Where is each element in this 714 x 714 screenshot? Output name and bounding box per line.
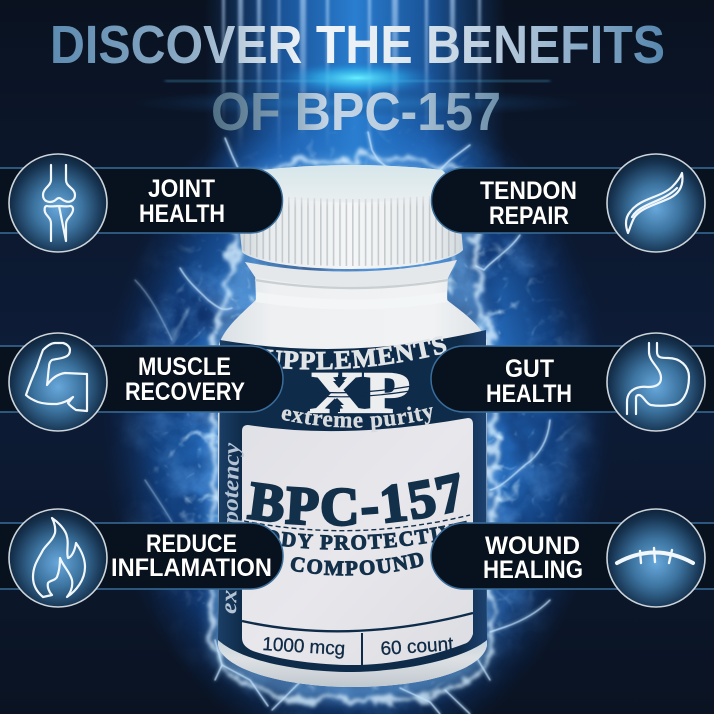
banner — [0, 346, 283, 412]
label: REDUCE — [146, 530, 237, 558]
banner — [431, 346, 714, 412]
neck shadow lines — [255, 280, 448, 304]
panel: muscle recovery — [0, 333, 283, 431]
label: WOUND — [485, 532, 580, 560]
icon: flame — [9, 509, 107, 607]
product name: BPC-157 — [246, 472, 460, 526]
icon: stitched wound — [607, 509, 705, 607]
label: GUT — [505, 355, 554, 383]
label — [486, 355, 572, 408]
panel: tendon repair — [432, 154, 714, 252]
lightning veins texture — [153, 130, 573, 710]
label — [111, 530, 272, 582]
brand tagline: extreme purity — [282, 406, 433, 432]
navy label band — [218, 330, 487, 672]
count: 60 count — [380, 634, 455, 660]
label — [125, 353, 245, 406]
lightning around bottle — [134, 130, 573, 714]
label: REPAIR — [489, 202, 569, 230]
dashed divider — [244, 515, 470, 531]
top energy glow above cap — [207, 123, 507, 207]
side text: extreme potency — [216, 442, 244, 614]
lower bottle lip — [218, 630, 487, 687]
brand name: SUPPLEMENTS — [266, 336, 446, 370]
label — [139, 175, 225, 228]
neck ring — [245, 260, 457, 287]
dose: 1000 mcg — [262, 634, 346, 660]
horizontal light disc — [131, 61, 583, 117]
label: HEALTH — [139, 200, 225, 228]
icon: tendon — [607, 154, 705, 252]
cap top — [250, 165, 455, 202]
banner — [0, 168, 282, 233]
label — [480, 177, 577, 230]
cloudy energy texture — [122, 234, 592, 714]
bright rim glow — [210, 158, 494, 702]
label: JOINT — [148, 175, 215, 203]
panel: wound healing — [431, 509, 714, 607]
lightning bolts — [135, 132, 550, 714]
jagged rim — [213, 158, 492, 702]
panel: joint health — [0, 154, 282, 252]
bottle body — [218, 272, 487, 687]
label: TENDON — [480, 177, 577, 205]
icon: stomach — [607, 333, 705, 431]
label bottom divider — [242, 613, 473, 667]
label: HEALING — [483, 556, 583, 584]
product description: COMPOUND — [290, 552, 424, 576]
label: RECOVERY — [125, 378, 245, 406]
vertical light beams — [205, 0, 505, 180]
white label panel — [242, 418, 473, 665]
icon: flexed arm — [9, 333, 107, 431]
banner — [432, 168, 714, 233]
title line 2: OF BPC-157 — [211, 82, 501, 142]
label — [483, 532, 583, 584]
bottle — [216, 165, 487, 687]
cap ribs — [243, 193, 461, 266]
label: HEALTH — [486, 380, 572, 408]
label: INFLAMATION — [111, 554, 272, 582]
icon: knee joint — [9, 154, 107, 252]
product description: BODY PROTECTIVE — [271, 520, 467, 550]
product description — [271, 520, 467, 576]
label: MUSCLE — [138, 353, 231, 381]
title — [50, 15, 665, 142]
banner — [431, 523, 714, 589]
banner — [0, 523, 283, 589]
panel: gut health — [431, 333, 714, 431]
panel: reduce inflammation — [0, 509, 283, 607]
brand logo XP: XP — [310, 360, 410, 425]
cap — [240, 165, 463, 269]
